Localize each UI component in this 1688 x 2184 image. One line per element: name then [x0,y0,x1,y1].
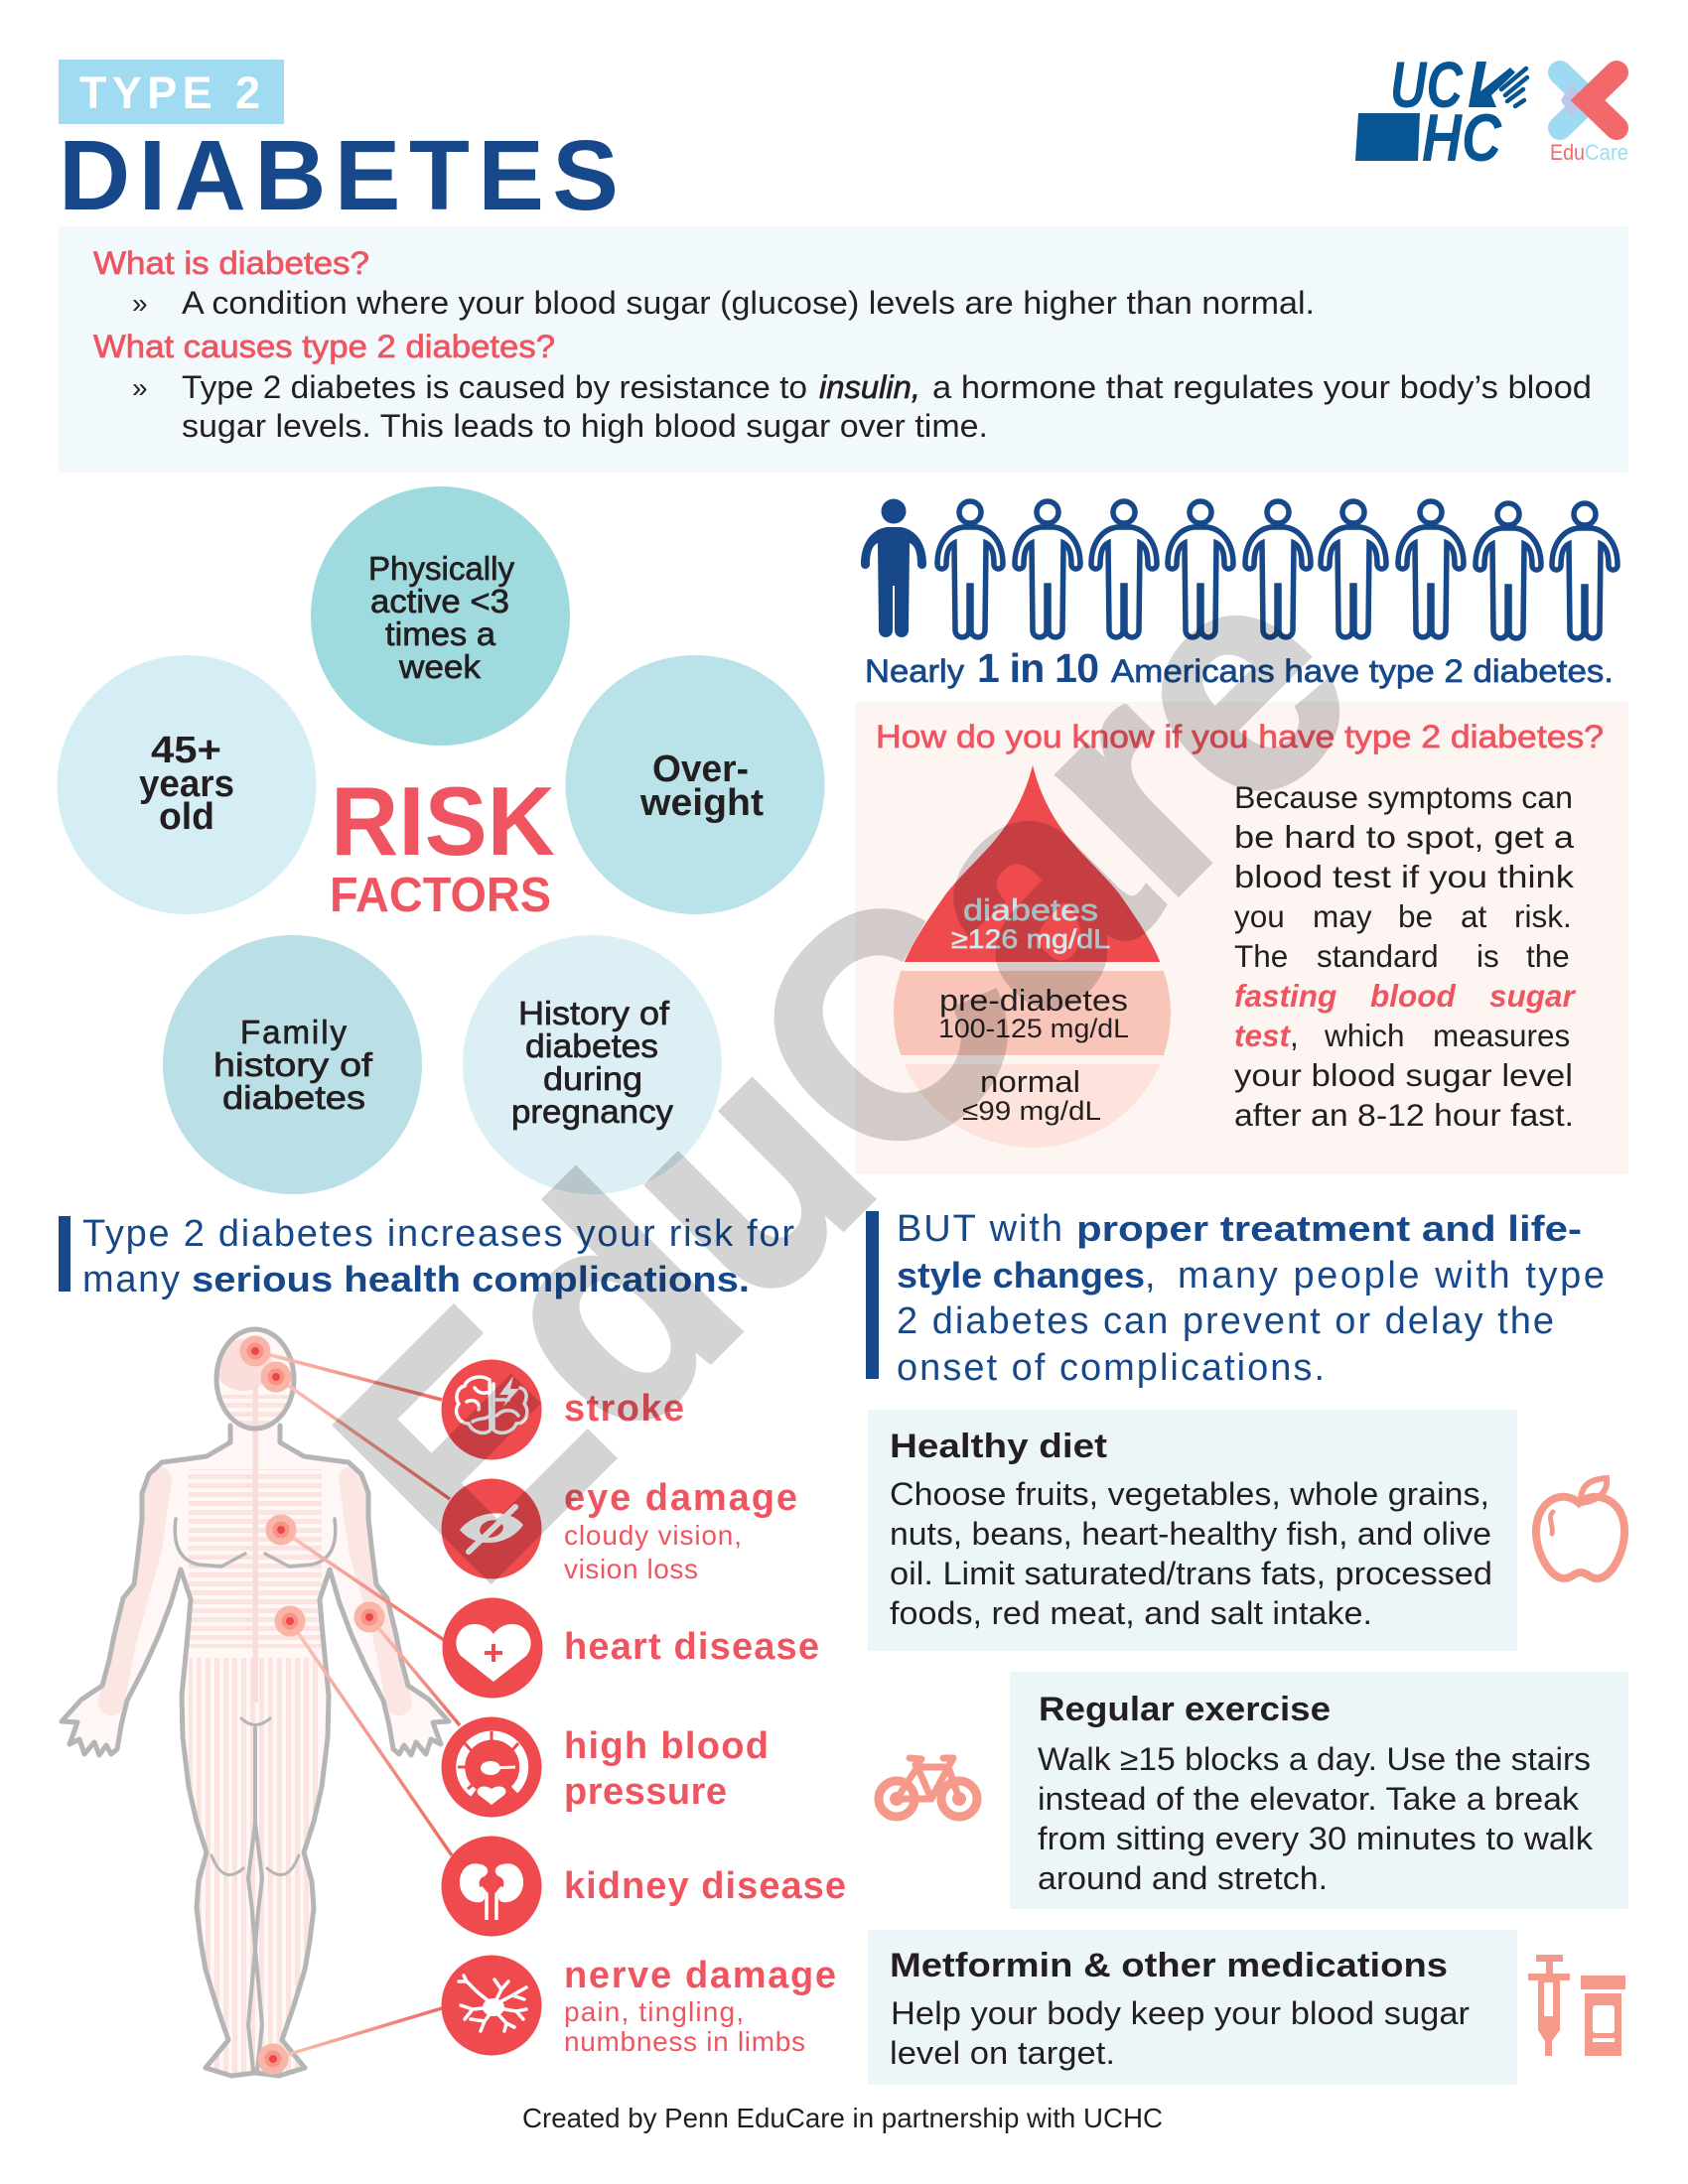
text: blood test advice: your blood sugar level [1234,1057,1573,1093]
panel: medications: Help your body keep your blood sugar [891,1995,1470,2031]
risk factor: physically active [311,486,570,746]
icon: bicycle [879,1758,977,1817]
icon: stroke brain [441,1360,542,1459]
heading: treatment: many people with type [1178,1255,1605,1297]
labels: complications: eye damage [564,1477,797,1519]
risk factor: pregnancy: pregnancy [511,1093,674,1130]
labels: complications: cloudy vision, [564,1520,742,1551]
risk factor: pregnancy: during [543,1060,642,1097]
heading: complications [59,1213,794,1300]
risk factor: overweight: Over- [652,749,749,790]
risk factor: age: 45+ [151,730,221,771]
labels: complications: pain, tingling, [564,1996,744,2027]
chart: blood sugar drop [894,765,1171,1148]
risk factor: family history: Family [240,1014,348,1050]
statistic: 1 in 10 [865,645,1614,691]
panel: healthy diet: Healthy diet [890,1428,1107,1465]
heading: complications: Type 2 diabetes increases your risk for [82,1213,794,1255]
text: blood test advice: standard [1317,938,1439,974]
drop labels: ≥126 mg/dL [951,924,1110,954]
logo: EduCare: Edu [1550,140,1585,165]
labels: complications: stroke [564,1388,684,1430]
labels: complications [564,1388,846,2057]
panel: healthy diet: foods, red meat, and salt intake. [890,1595,1372,1631]
text: blood test advice: may [1313,898,1372,934]
statistic: 1 in 10: 1 in 10 [977,645,1099,691]
statistic: 1 in 10: Nearly [865,653,964,689]
risk factor: age [58,655,316,914]
labels: complications: kidney disease [564,1865,846,1907]
statistic: 1 in 10: Americans have type 2 diabetes. [1111,653,1614,689]
panel: regular exercise [1010,1672,1628,1909]
labels: complications: pressure [564,1771,727,1813]
icon: kidneys [441,1837,542,1936]
heading: complications: serious health complications. [192,1259,750,1299]
risk factor: physically active: week [398,648,482,685]
panel: what is diabetes: » [132,288,148,319]
text: blood test advice: , [1290,1018,1299,1053]
text: blood test advice: at [1461,898,1487,934]
heading: treatment [866,1208,1605,1389]
connector lines [255,1351,460,2059]
body outline [62,1329,449,2076]
logo: UCHC: HC [1422,100,1502,176]
panel: healthy diet: Choose fruits, vegetables, whole grains, [890,1476,1489,1512]
text: blood test advice: which [1324,1018,1405,1053]
text: blood test advice: be [1398,898,1433,934]
text: blood test advice: blood test if you think [1234,859,1574,894]
panel: what is diabetes: What causes type 2 diabetes? [93,329,555,364]
text: blood test advice: is [1477,938,1499,974]
labels: complications: high blood [564,1725,769,1767]
risk factor: pregnancy [463,935,722,1194]
text: blood test advice: fasting [1234,978,1336,1014]
risk factor: pregnancy: History of [518,995,670,1031]
text: blood test advice [1234,779,1577,1133]
drop labels [938,892,1129,1126]
risk factor: family history: diabetes [222,1079,365,1116]
heading: treatment: onset of complications. [897,1347,1325,1389]
heading: complications: many [82,1259,180,1300]
panel: regular exercise: Walk ≥15 blocks a day. Use the stairs [1038,1741,1591,1777]
labels: complications: vision loss [564,1554,698,1584]
pictogram: 1 in 10 people [861,498,1618,638]
logo: EduCare: Care [1585,140,1628,165]
heading: treatment: 2 diabetes can prevent or delay the [897,1300,1554,1342]
panel: what is diabetes [59,226,1628,473]
risk factor: overweight: weight [639,782,764,824]
heading: treatment: BUT with [897,1208,1062,1250]
labels: complications: nerve damage [564,1955,836,1996]
risk factor: pregnancy: diabetes [525,1027,658,1064]
pain spots [240,1336,385,2075]
heading: risk factors: FACTORS [330,869,551,922]
logo: UCHC [1355,48,1527,176]
panel: healthy diet [868,1410,1517,1651]
heading: risk factors [330,766,555,922]
risk factor: physically active: times a [385,615,496,652]
heading: risk factors: RISK [331,766,555,876]
heading: treatment: , [1145,1255,1156,1297]
labels: complications: heart disease [564,1626,819,1668]
labels: complications: numbness in limbs [564,2026,805,2057]
panel: how do you know [855,702,1628,1174]
text: blood test advice: blood [1370,978,1456,1014]
footer credit: Created by Penn EduCare in partnership with UCHC [522,2103,1163,2133]
icon: syringe and pill bottle [1528,1955,1625,2056]
drop labels: pre-diabetes [939,983,1128,1018]
watermark: EduCare [273,499,1416,1642]
panel: healthy diet: nuts, beans, heart-healthy fish, and olive [890,1516,1491,1552]
risk factor: overweight [566,655,824,914]
drop labels: 100-125 mg/dL [938,1014,1129,1043]
illustration: human body [40,1320,467,2085]
panel: regular exercise: around and stretch. [1038,1860,1328,1896]
drop labels: diabetes [963,892,1098,927]
risk factor: age: old [159,796,214,838]
panel: healthy diet: oil. Limit saturated/trans fats, processed [890,1556,1492,1591]
panel: regular exercise: instead of the elevator. Take a break [1038,1781,1580,1817]
logo: EduCare [1550,72,1628,165]
risk factor: family history: history of [213,1046,373,1083]
text: blood test advice: the [1526,938,1570,974]
icon: apple [1536,1478,1624,1578]
panel: regular exercise: from sitting every 30 minutes to walk [1038,1821,1594,1856]
panel: what is diabetes: What is diabetes? [93,245,369,281]
panel: what is diabetes: Type 2 diabetes is caused by resistance to [182,369,807,405]
heading: type 2 label: TYPE 2 [79,68,260,118]
panel: what is diabetes: sugar levels. This leads to high blood sugar over time. [182,408,988,444]
text: blood test advice: after an 8-12 hour fast. [1234,1097,1574,1133]
drop labels: normal [980,1064,1080,1099]
panel: what is diabetes: insulin, [819,369,920,405]
title: diabetes: DIABETES [59,120,619,231]
panel: regular exercise: Regular exercise [1039,1691,1331,1728]
text: blood test advice: risk. [1514,898,1572,934]
heading: treatment: style changes [897,1255,1145,1296]
heading: treatment: proper treatment and life- [1076,1208,1582,1249]
panel: what is diabetes: » [132,372,148,403]
risk factor: physically active: active <3 [370,583,509,619]
icon: heart [443,1598,542,1698]
logo: UCHC: UC [1390,48,1464,121]
text: blood test advice: Because symptoms can [1234,779,1573,815]
panel: how do you know: How do you know if you have type 2 diabetes? [876,719,1604,754]
drop labels: ≤99 mg/dL [962,1096,1101,1126]
panel: medications [868,1930,1517,2085]
nerve texture [68,1332,443,2073]
panel: medications: level on target. [890,2035,1115,2071]
text: blood test advice: be hard to spot, get a [1234,819,1575,855]
heading: type 2 label [59,60,284,124]
icon: eye [441,1479,542,1578]
text: blood test advice: test [1234,1018,1292,1053]
icon: blood pressure gauge [441,1717,542,1817]
risk factor: family history [163,935,422,1194]
panel: what is diabetes: A condition where your blood sugar (glucose) levels are higher than normal. [182,285,1315,321]
text: blood test advice: you [1234,898,1285,934]
risk factor: physically active: Physically [368,550,514,587]
text: blood test advice: sugar [1489,978,1577,1014]
panel: what is diabetes: a hormone that regulates your body’s blood [932,369,1592,405]
risk factor: age: years [139,763,234,805]
panel: medications: Metformin & other medications [890,1947,1448,1984]
icon: nerve cell [441,1956,542,2055]
text: blood test advice: The [1234,938,1288,974]
text: blood test advice: measures [1433,1018,1570,1053]
